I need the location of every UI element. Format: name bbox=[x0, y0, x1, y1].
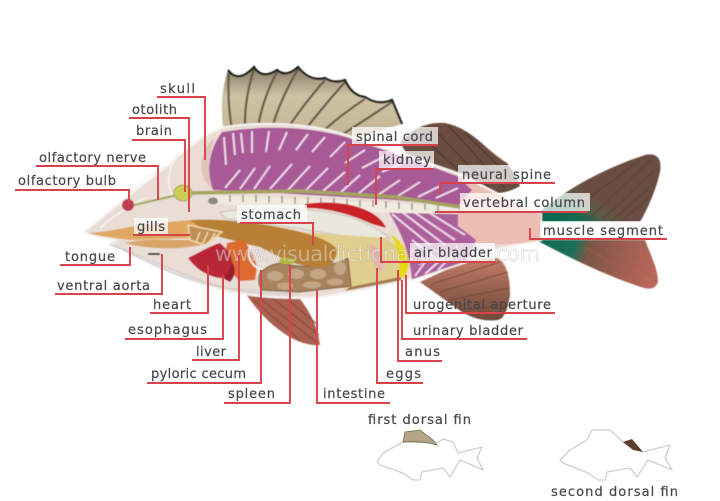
first dorsal fin bbox=[222, 67, 402, 140]
label: urinary bladder: urinary bladder bbox=[413, 324, 524, 339]
label: gills: gills bbox=[137, 220, 165, 235]
ventral aorta bbox=[148, 253, 160, 255]
label: liver: liver bbox=[196, 345, 227, 360]
label: skull bbox=[157, 82, 205, 160]
second dorsal fin bbox=[400, 123, 520, 193]
intestine bbox=[259, 258, 351, 292]
gills bbox=[188, 225, 222, 245]
label: anus bbox=[398, 270, 442, 361]
label: intestine bbox=[317, 290, 390, 403]
abdomen floor bbox=[345, 277, 402, 291]
esophagus bbox=[224, 262, 235, 282]
label: spinal cord: spinal cord bbox=[356, 130, 433, 145]
head detail bbox=[201, 138, 215, 190]
vertebral column bbox=[208, 195, 460, 214]
pyloric cecum bbox=[249, 246, 262, 270]
muscle segments bbox=[458, 175, 541, 245]
white rib lines bbox=[383, 147, 493, 281]
label: ventral aorta: ventral aorta bbox=[57, 279, 150, 294]
label: eggs bbox=[377, 268, 423, 383]
label: pyloric cecum bbox=[147, 270, 261, 383]
eggs bbox=[370, 244, 384, 272]
label: spinal cord bbox=[348, 127, 438, 185]
label: kidney: kidney bbox=[383, 153, 431, 168]
label: anus: anus bbox=[405, 345, 440, 360]
label: kidney bbox=[376, 151, 434, 205]
label: esophagus: esophagus bbox=[128, 323, 207, 338]
label: neural spine bbox=[440, 165, 555, 193]
label: brain bbox=[132, 124, 185, 192]
label: neural spine: neural spine bbox=[462, 168, 551, 183]
label: stomach bbox=[237, 205, 313, 245]
label: brain: brain bbox=[136, 124, 172, 139]
label: pyloric cecum: pyloric cecum bbox=[151, 367, 246, 382]
label: olfactory nerve: olfactory nerve bbox=[39, 151, 146, 166]
label: urinary bladder bbox=[402, 280, 527, 339]
label: intestine: intestine bbox=[323, 387, 385, 402]
label: vertebral column bbox=[435, 193, 590, 212]
label: stomach: stomach bbox=[241, 208, 301, 223]
label: muscle segment: muscle segment bbox=[543, 224, 663, 239]
label: skull: skull bbox=[160, 82, 195, 97]
purple dorsal muscle bbox=[209, 128, 472, 206]
air bladder bbox=[220, 209, 390, 238]
label: air bladder bbox=[381, 237, 495, 262]
label: urogenital aperture bbox=[406, 275, 555, 313]
locator: second dorsal fin bbox=[551, 430, 678, 500]
label: otolith: otolith bbox=[132, 103, 177, 118]
spleen bbox=[279, 258, 295, 264]
locator: first dorsal fin bbox=[368, 413, 483, 480]
locator: second dorsal fin: second dorsal fin bbox=[551, 485, 678, 500]
label: tongue: tongue bbox=[65, 250, 115, 265]
mouth and tongue bbox=[88, 220, 215, 240]
purple ventral muscle bbox=[385, 207, 476, 280]
liver bbox=[226, 240, 257, 281]
fish body bbox=[84, 124, 541, 298]
label: tongue bbox=[60, 247, 130, 265]
abdomen bbox=[300, 232, 402, 290]
locator: first dorsal fin: first dorsal fin bbox=[368, 413, 471, 428]
kidney bbox=[305, 202, 386, 228]
fish illustration bbox=[84, 67, 660, 345]
olfactory bulb bbox=[122, 199, 134, 211]
tail fin bbox=[536, 154, 660, 289]
label: heart bbox=[150, 265, 208, 313]
pelvic fin bbox=[246, 294, 320, 345]
heart bbox=[188, 243, 232, 278]
stomach bbox=[190, 220, 337, 267]
watermark: www.visualdictionaryonline.com bbox=[215, 242, 540, 266]
label: olfactory bulb: olfactory bulb bbox=[18, 174, 116, 189]
label: air bladder: air bladder bbox=[414, 246, 493, 261]
anal fin bbox=[420, 258, 510, 321]
icon: fish outline with second dorsal fin bbox=[560, 430, 672, 480]
label: olfactory bulb bbox=[15, 174, 129, 204]
brain bbox=[174, 185, 192, 201]
label: urogenital aperture: urogenital aperture bbox=[413, 298, 551, 313]
urinary bladder bbox=[390, 234, 409, 278]
label: liver bbox=[192, 255, 239, 360]
label: esophagus bbox=[125, 275, 223, 339]
label: spleen bbox=[224, 265, 290, 403]
label: vertebral column: vertebral column bbox=[463, 196, 585, 211]
label: heart: heart bbox=[153, 298, 191, 313]
spinal cord and olfactory nerve bbox=[134, 191, 460, 207]
icon: fish outline with first dorsal fin bbox=[377, 430, 483, 480]
label: ventral aorta bbox=[55, 254, 162, 294]
label: gills bbox=[133, 218, 190, 235]
label: otolith bbox=[129, 103, 189, 212]
label: spleen: spleen bbox=[228, 387, 275, 402]
label: eggs: eggs bbox=[386, 367, 421, 382]
label: olfactory nerve bbox=[36, 151, 158, 200]
